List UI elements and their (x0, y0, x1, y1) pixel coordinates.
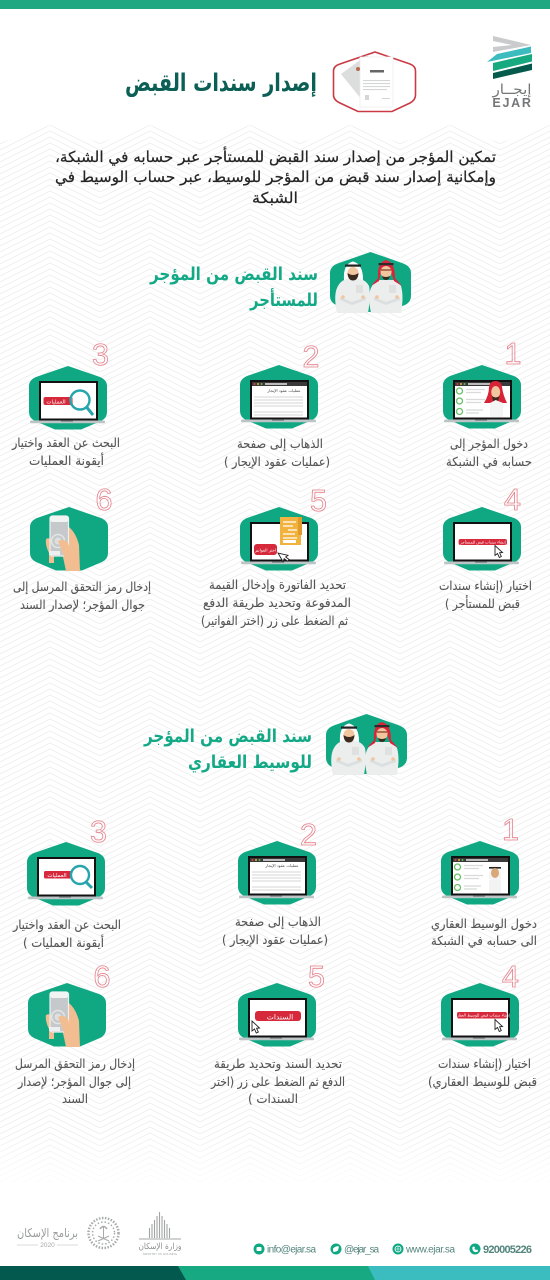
broker step 5: السندات ) (248, 1091, 298, 1106)
intro text (55, 146, 496, 207)
footer: contact info: info@ejar.sa (267, 1244, 316, 1256)
broker step 4: 4 (502, 960, 519, 994)
step 1: دخول المؤجر إلى (450, 436, 528, 452)
title: إصدار سندات القبض (125, 68, 317, 97)
step 3: البحث عن العقد واختيار (11, 435, 120, 451)
step 6: جوال المؤجر؛ لإصدار السند (20, 597, 145, 613)
bottom bar (0, 1266, 550, 1280)
footer: star emblem (88, 1218, 118, 1248)
step 5: اختر الفواتير (254, 548, 276, 552)
intro text: تمكين المؤجر من إصدار سند القبض للمستأجر عبر حسابه في الشبكة، (55, 146, 496, 167)
step 4 (439, 483, 532, 612)
footer: housing program logo (17, 1226, 78, 1249)
broker step 1: 1 (502, 813, 519, 847)
broker step 3: العمليات (47, 873, 67, 879)
step 1 (443, 337, 532, 469)
step 6 (13, 483, 151, 613)
section heading: receipt from lessor to broker: سند القبض من المؤجر (143, 726, 312, 747)
footer: ministry of housing logo: MINISTRY OF HOUSING (143, 1252, 178, 1256)
broker step 6: إلى جوال المؤجر؛ لإصدار (17, 1074, 131, 1090)
step 4: إنشاء سندات قبض للمستأجر (459, 540, 506, 546)
section heading: receipt from lessor to tenant (149, 264, 318, 311)
step 1: حسابه في الشبكة (446, 454, 532, 469)
icon: receipt document in red hexagon (334, 52, 416, 112)
broker step 2: عمليات عقود الإيجار (264, 863, 299, 869)
broker step 5: السندات (267, 1012, 293, 1022)
broker step 6: السند (62, 1091, 88, 1106)
section heading: receipt from lessor to broker (143, 726, 312, 773)
broker step 3: أيقونة العمليات ) (23, 934, 104, 951)
broker step 6: إدخال رمز التحقق المرسل (15, 1056, 135, 1072)
broker step 5: 5 (308, 960, 325, 994)
footer: ministry of housing logo (138, 1212, 182, 1256)
step 5: تحديد الفاتورة وإدخال القيمة (209, 577, 346, 593)
broker step 4: إنشاء سندات قبض للوسيط العقاري (454, 1012, 510, 1018)
step 5: 5 (310, 484, 327, 518)
broker step 3: البحث عن العقد واختيار (12, 917, 121, 933)
step 3: 3 (92, 338, 109, 372)
broker step 1: الى حسابه في الشبكة (431, 933, 537, 948)
broker step 5: الدفع ثم الضغط على زر (اختر (210, 1074, 345, 1090)
step 5: المدفوعة وتحديد طريقة الدفع (203, 595, 351, 611)
footer: contact info (254, 1244, 532, 1256)
footer: housing program logo: برنامج الإسكان (17, 1226, 78, 1241)
broker step 3: 3 (90, 815, 107, 849)
logo: EJAR: إيجــار (491, 82, 532, 98)
step 5 (201, 484, 351, 629)
broker step 3 (12, 815, 121, 951)
broker step 6: 6 (94, 960, 110, 994)
broker step 5: تحديد السند وتحديد طريقة (214, 1056, 342, 1072)
step 5: ثم الضغط على زر (اختر الفواتير) (201, 613, 348, 629)
broker step 5 (210, 960, 345, 1106)
step 2: عمليات عقود الإيجار (266, 388, 301, 394)
broker step 2 (222, 818, 328, 948)
logo: EJAR: EJAR (492, 96, 533, 110)
footer: contact info: 920005226 (483, 1244, 532, 1256)
logo: EJAR (487, 36, 533, 110)
footer: ministry of housing logo: وزارة الإسكان (138, 1242, 182, 1252)
step 2: 2 (303, 340, 319, 374)
intro text: وإمكانية إصدار سند قبض من المؤجر للوسيط، عبر حساب الوسيط في (55, 168, 496, 187)
broker step 4: قبض للوسيط العقاري) (428, 1074, 537, 1090)
step 1: 1 (505, 337, 521, 371)
broker step 1: دخول الوسيط العقاري (431, 916, 537, 932)
step 3: أيقونة العمليات (29, 452, 104, 469)
top bar (0, 0, 550, 9)
icon: two men (330, 252, 411, 313)
broker step 1 (431, 813, 537, 948)
step 2: (عمليات عقود الإيجار ) (224, 454, 330, 470)
icon: two men (326, 714, 407, 775)
step 6: 6 (96, 483, 112, 517)
footer: contact info: www.ejar.sa (405, 1244, 455, 1256)
section heading: receipt from lessor to tenant: للمستأجر (249, 288, 318, 311)
step 4: اختيار (إنشاء سندات (439, 578, 532, 594)
broker step 2: الذهاب إلى صفحة (235, 914, 321, 929)
broker step 6 (15, 960, 135, 1106)
step 4: 4 (504, 483, 521, 517)
step 4: قبض للمستأجر ) (445, 595, 520, 612)
step 3 (11, 338, 120, 469)
footer: housing program logo: 2020 (40, 1242, 55, 1249)
section heading: receipt from lessor to tenant: سند القبض من المؤجر (149, 264, 318, 285)
broker step 4 (428, 960, 537, 1090)
step 6: إدخال رمز التحقق المرسل إلى (13, 579, 151, 595)
section heading: receipt from lessor to broker: للوسيط العقاري (188, 752, 312, 773)
footer: contact info: @ejar_sa (344, 1244, 379, 1256)
step 2: الذهاب إلى صفحة (237, 436, 323, 451)
step 3: العمليات (46, 400, 66, 406)
broker step 2: (عمليات عقود الإيجار ) (222, 932, 328, 948)
intro text: الشبكة (252, 189, 298, 207)
broker step 2: 2 (300, 818, 317, 852)
broker step 4: اختيار (إنشاء سندات (438, 1056, 531, 1072)
step 2 (224, 340, 330, 470)
